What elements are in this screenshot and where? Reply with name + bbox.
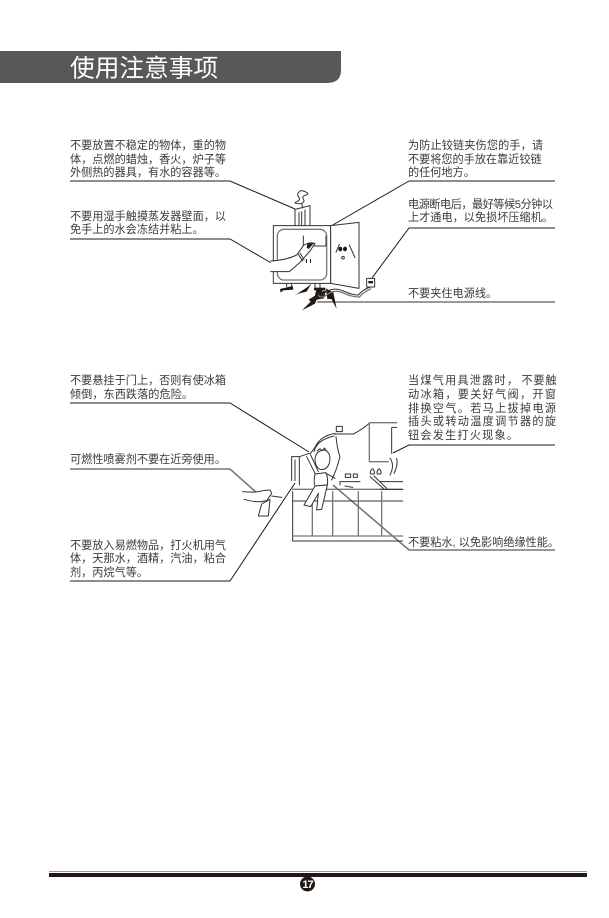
wall outlet with plugs and cords: [310, 423, 370, 480]
illustration: kitchen scene with child: [243, 423, 403, 541]
note: gas leak warning: 不要触: [522, 373, 556, 387]
note: do not hang on door: [70, 373, 309, 452]
icon: candle tube on top: [295, 206, 310, 226]
page number badge: [300, 876, 315, 892]
note: hinge warning: [331, 138, 555, 226]
note: wait five minutes after power off: 电源断电后，最好等候5分钟以: [408, 197, 553, 211]
title: 使用注意事项: [70, 54, 218, 82]
kitchen counter and cabinets: [293, 489, 403, 541]
note: flammable spray: [70, 452, 257, 493]
note: do not touch evaporator with wet hands: 不要用湿手触摸蒸发器壁面，以: [70, 209, 226, 223]
power cord: [318, 287, 371, 297]
hand touching wall: [271, 243, 315, 272]
gas stove with flames: [370, 458, 403, 489]
wall socket: [367, 278, 375, 287]
note: do not place unstable objects: 不要放置不稳定的物体，重的物: [70, 138, 226, 152]
note: flammable spray: 可燃性喷雾剂不要在近旁使用。: [70, 452, 226, 466]
note: hinge warning: 的任何地方。: [408, 165, 475, 179]
note: do not place unstable objects: [70, 138, 295, 209]
illustration: refrigerator with open door: [271, 191, 375, 310]
child climbing: [304, 448, 335, 510]
note: do not wet: 不要粘水, 以免影响绝缘性能。: [408, 535, 559, 549]
note: gas leak warning: [393, 373, 556, 453]
note: hinge warning: 为防止铰链夹伤您的手，请: [408, 138, 543, 152]
note: gas leak warning: 插头或转动温度调节器的旋: [408, 414, 556, 428]
footer rule: [49, 871, 587, 877]
hand with spray can: [243, 490, 282, 516]
kitchen utensils: [340, 474, 360, 487]
feet and shock marks: [280, 283, 337, 310]
note: flammable objects: 不要放入易燃物品，打火机用气: [70, 538, 226, 552]
note: flammable objects: 体，天那水，酒精，汽油，粘合: [70, 551, 226, 565]
note: do not place unstable objects: 体，点燃的蜡烛，香火，炉子等: [70, 152, 226, 166]
note: wait five minutes after power off: 上才通电，以免损坏压缩机。: [408, 210, 553, 224]
note: do not touch evaporator with wet hands: [70, 209, 273, 264]
note: do not pinch power cord: 不要夹住电源线。: [408, 286, 497, 300]
refrigerator cabinet: [273, 226, 331, 283]
wall cabinet and gas pipe: [369, 423, 397, 462]
refrigerator: [292, 453, 309, 485]
header banner: [0, 51, 341, 83]
note: gas leak warning: 动冰箱，要关好气阀，开窗: [408, 387, 556, 401]
note: wait five minutes after power off: [372, 197, 555, 278]
icon: smoke: [295, 191, 308, 208]
note: hinge warning: 不要将您的手放在靠近铰链: [408, 152, 542, 166]
note: gas leak warning: 钮会发生打火现象。: [408, 428, 518, 442]
note: do not touch evaporator with wet hands: 免手上的水会冻结并粘上。: [70, 222, 204, 236]
note: do not hang on door: 倾倒，东西跌落的危险。: [70, 387, 193, 401]
note: gas leak warning: 当煤气用具泄露时，: [408, 373, 518, 387]
note: do not wet: [333, 485, 559, 550]
page number badge: 17: [302, 879, 313, 891]
note: flammable objects: [70, 483, 295, 581]
note: gas leak warning: 排换空气。若马上拔掉电源: [408, 401, 556, 415]
note: do not place unstable objects: 外侧热的器具，有水的容器等。: [70, 165, 226, 179]
note: flammable objects: 剂，丙烷气等。: [70, 565, 148, 579]
open door with face decal: [331, 222, 359, 288]
note: do not hang on door: 不要悬挂于门上，否则有使冰箱: [70, 373, 226, 387]
